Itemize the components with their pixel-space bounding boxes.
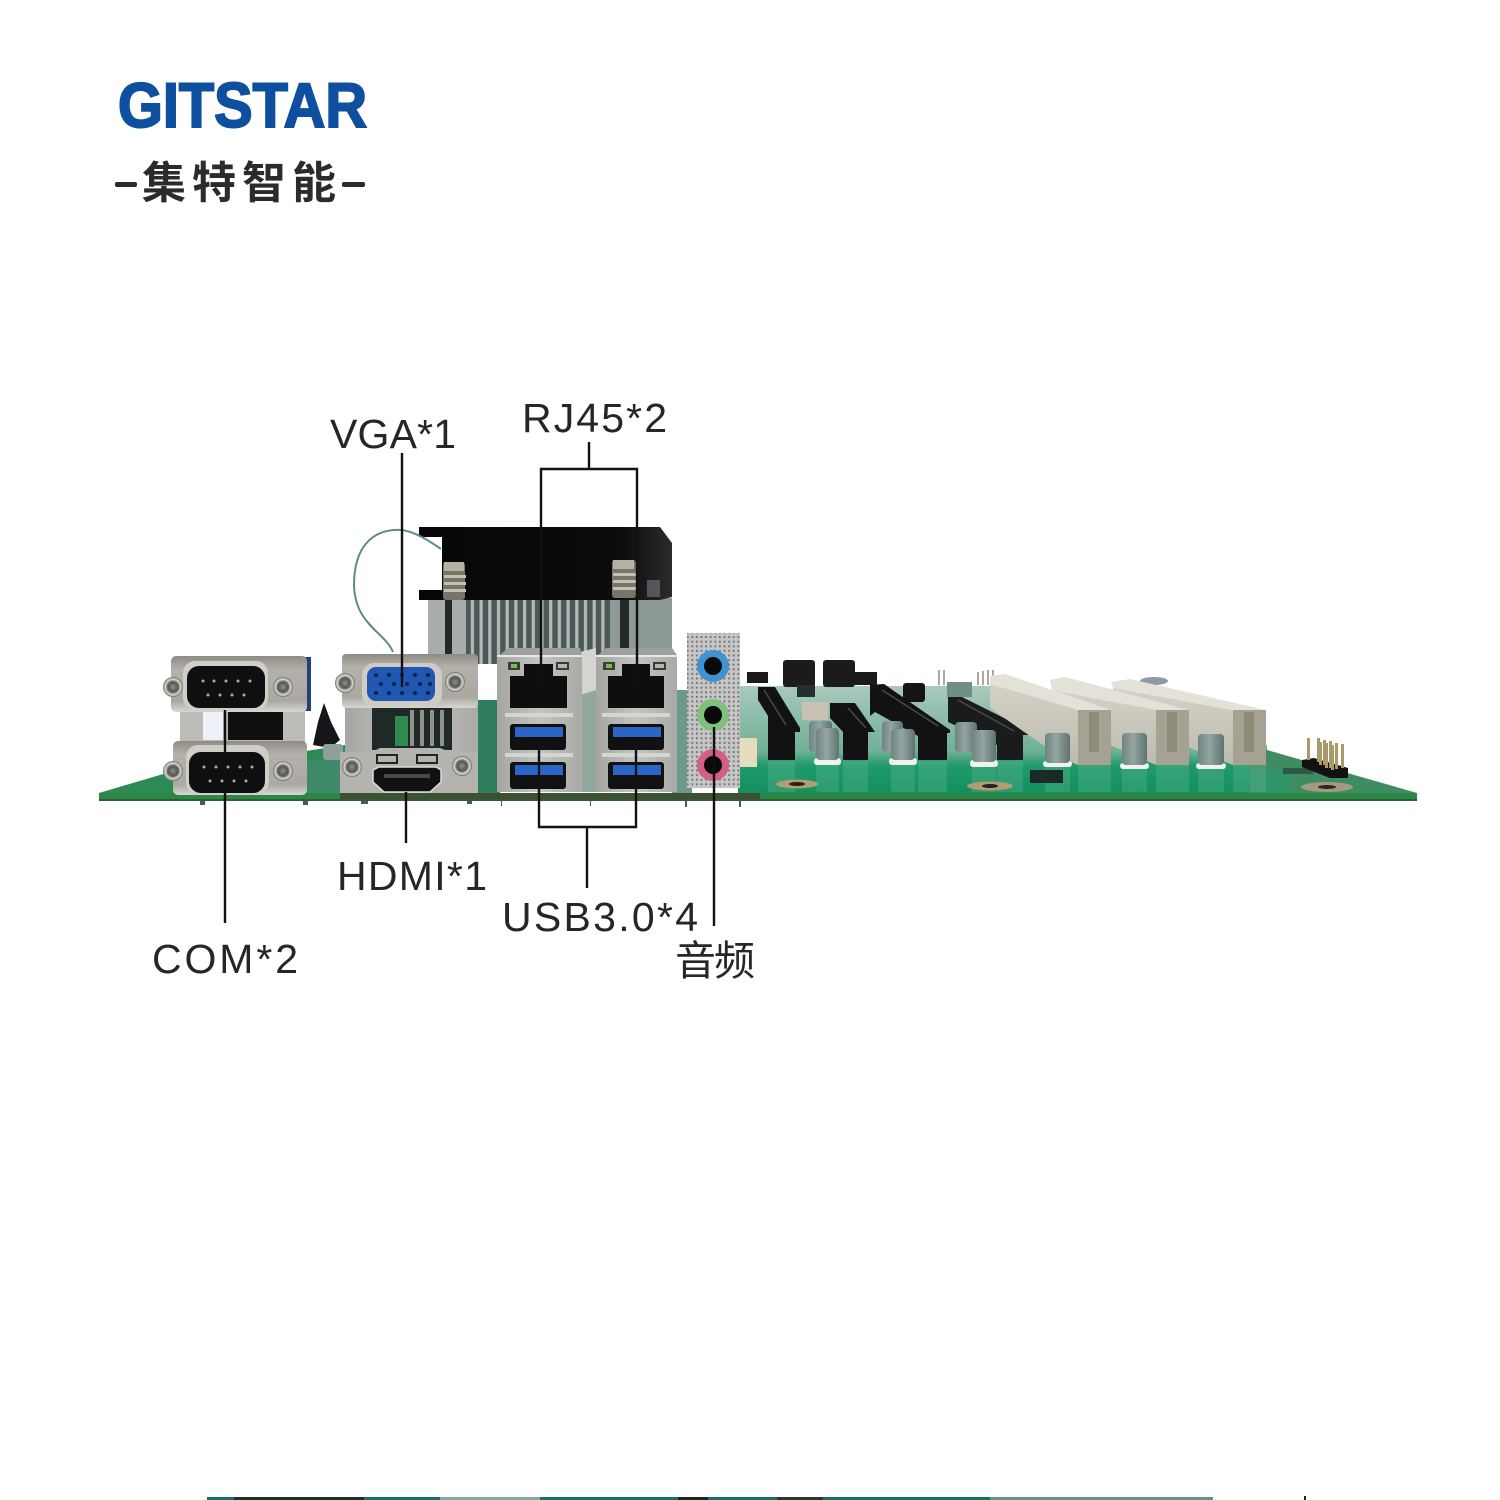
RJ45 and USB stack left (497, 648, 596, 792)
COM leader (224, 710, 226, 923)
logo: Chinese brand name: 集特智能 (142, 159, 342, 208)
cropped next image strip at bottom edge (207, 1496, 1306, 1500)
PCB board (99, 686, 1417, 807)
mounting holes (776, 780, 1353, 792)
RJ45 and USB stack right (596, 648, 677, 792)
label: VGA: VGA*1 (330, 411, 456, 457)
capacitors (809, 721, 1226, 769)
PCI slot 2 (1050, 677, 1189, 765)
fan wire (354, 530, 441, 652)
PCIe slots (758, 684, 1028, 760)
COM bottom (163, 741, 307, 795)
board rear parts: pins, clips and connectors (740, 660, 1313, 783)
COM ports (163, 656, 311, 795)
RJ45 bracket (541, 442, 637, 690)
small black component and capacitor behind ports (307, 703, 343, 793)
heatsink and fan (419, 527, 672, 664)
VGA leader (401, 453, 403, 687)
HDMI port (340, 748, 478, 793)
label: USB: USB3.0*4 (502, 894, 698, 940)
leader lines (225, 442, 714, 926)
HDMI leader (405, 792, 407, 843)
label: audio: 音频 (675, 938, 755, 984)
COM top (163, 656, 307, 712)
pin header (1302, 738, 1348, 778)
VGA port (335, 654, 478, 708)
logo: GITSTAR wordmark: GITSTAR (118, 71, 367, 141)
PCI slot 1 (990, 674, 1111, 765)
screw left (443, 562, 466, 600)
label: COM: COM*2 (152, 936, 298, 982)
audio leader (713, 727, 715, 926)
USB bracket (539, 748, 636, 888)
PCI white slots (990, 674, 1266, 765)
label: HDMI: HDMI*1 (337, 853, 487, 899)
motherboard photo illustration (99, 527, 1417, 807)
VGA and HDMI stack (335, 654, 478, 793)
audio jacks (687, 633, 740, 788)
screw right (612, 560, 637, 598)
PCI slot 3 (1111, 677, 1266, 765)
label: RJ45: RJ45*2 (522, 395, 667, 441)
